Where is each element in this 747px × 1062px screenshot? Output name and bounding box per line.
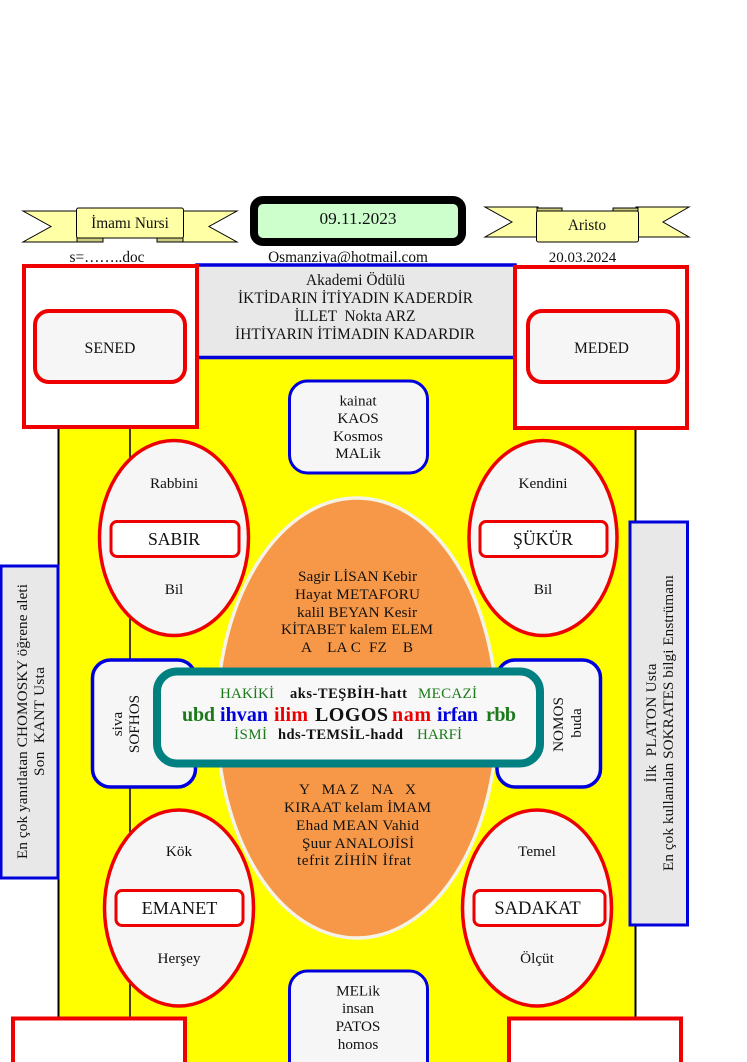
panel: LOGOS: aks-TEŞBİH-hatt	[290, 685, 407, 702]
panel: SOFHOS	[92, 660, 196, 787]
side panel: right	[630, 522, 688, 925]
oval: SABIR: SABIR	[148, 529, 200, 549]
oval: EMANET: Herşey	[157, 950, 201, 967]
panel: MELik: MELik	[336, 982, 380, 1000]
panel: LOGOS: irfan	[437, 704, 478, 726]
panel: NOMOS: NOMOS	[550, 697, 567, 752]
oval: EMANET	[104, 810, 254, 1006]
panel: LOGOS: HARFİ	[417, 727, 462, 743]
panel: header: Akademi Ödülü	[306, 272, 405, 289]
panel: LOGOS: HAKİKİ	[220, 686, 274, 702]
oval: SADAKAT: SADAKAT	[494, 899, 581, 919]
central orange ellipse: KIRAAT kelam İMAM	[284, 799, 431, 816]
central orange ellipse: KİTABET kalem ELEM	[281, 621, 433, 638]
oval: ŞÜKÜR	[469, 440, 617, 636]
panel: SOFHOS: siva	[109, 712, 126, 736]
panel: LOGOS: hds-TEMSİL-hadd	[278, 726, 403, 743]
central orange ellipse: Sagir LİSAN Kebir	[298, 568, 417, 585]
oval: EMANET: Kök	[166, 843, 192, 860]
panel: MELik: PATOS	[336, 1018, 380, 1035]
date box	[254, 200, 462, 242]
oval: SABIR	[100, 440, 248, 636]
panel: SENED	[24, 266, 197, 427]
side panel: left: En çok yanıtlatan CHOMOSKY öğrene aleti	[14, 584, 31, 859]
oval: ŞÜKÜR: Kendini	[519, 475, 567, 492]
oval: SADAKAT: Ölçüt	[520, 950, 555, 967]
panel: LOGOS: LOGOS	[315, 704, 388, 726]
yellow background panel	[58, 340, 636, 1062]
central orange ellipse: Şuur ANALOJİSİ	[302, 835, 414, 852]
central orange ellipse: A LA C FZ B	[301, 639, 413, 656]
panel: header: İLLET Nokta ARZ	[294, 308, 416, 325]
panel: LOGOS: ilim	[274, 704, 308, 726]
ribbon: İmamı Nursi	[23, 208, 237, 242]
central orange ellipse: Y MA Z NA X	[299, 781, 416, 798]
panel: header: İKTİDARIN İTİYADIN KADERDİR	[238, 290, 474, 307]
panel: MEDED	[515, 267, 687, 428]
oval: SADAKAT	[462, 810, 612, 1006]
central orange ellipse: kalil BEYAN Kesir	[297, 604, 417, 621]
panel: MELik	[290, 971, 428, 1062]
ribbon: Aristo: Aristo	[568, 217, 606, 234]
panel: NOMOS	[497, 660, 600, 787]
oval: ŞÜKÜR: Bil	[534, 581, 552, 598]
panel: LOGOS: rbb	[486, 704, 516, 726]
panel: LOGOS: ihvan	[220, 704, 268, 726]
side panel: left: Son KANT Usta	[31, 667, 48, 776]
panel: kainat: kainat	[339, 392, 377, 410]
email label: Osmanziya@hotmail.com	[268, 249, 428, 266]
central orange ellipse: tefrit ZİHİN İfrat	[297, 852, 412, 869]
panel: MEDED: MEDED	[574, 340, 629, 357]
panel: LOGOS	[157, 672, 540, 764]
central orange ellipse: Hayat METAFORU	[295, 586, 420, 603]
panel: LOGOS: İSMİ	[234, 727, 267, 743]
side panel: right: En çok kullanılan SOKRATES bilgi Enstrümanı	[660, 575, 677, 871]
side panel: left	[1, 566, 58, 878]
date label: 20.03.2024	[549, 250, 617, 266]
panel: NOMOS: buda	[568, 708, 585, 738]
oval: SADAKAT: Temel	[518, 843, 556, 860]
oval: SABIR: Rabbini	[150, 475, 198, 492]
oval: SABIR: Bil	[165, 581, 183, 598]
date box: 09.11.2023	[319, 209, 397, 228]
panel: header: İHTİYARIN İTİMADIN KADARDIR	[235, 326, 476, 343]
ribbon: Aristo	[485, 207, 689, 242]
panel: kainat	[290, 381, 428, 473]
panel: LOGOS: nam	[392, 704, 431, 726]
panel: LOGOS: MECAZİ	[418, 686, 477, 702]
panel: MELik: insan	[342, 1000, 374, 1017]
oval: EMANET: EMANET	[142, 898, 217, 918]
central orange ellipse	[217, 498, 497, 938]
oval: ŞÜKÜR: ŞÜKÜR	[513, 529, 573, 549]
ribbon: İmamı Nursi: İmamı Nursi	[91, 215, 169, 232]
file name label: s=……..doc	[70, 249, 145, 266]
panel: kainat: KAOS	[337, 410, 379, 427]
panel: kainat: MALik	[335, 445, 381, 462]
panel: kainat: Kosmos	[333, 428, 383, 445]
panel: SOFHOS: SOFHOS	[126, 695, 143, 753]
bottom right box	[509, 1018, 681, 1062]
bottom left box	[13, 1018, 185, 1062]
panel: LOGOS: ubd	[182, 704, 215, 726]
side panel: right: İlk PLATON Usta	[643, 663, 660, 782]
panel: SENED: SENED	[85, 340, 135, 357]
panel: MELik: homos	[338, 1036, 378, 1053]
panel: header	[197, 265, 515, 358]
central orange ellipse: Ehad MEAN Vahid	[296, 817, 419, 834]
